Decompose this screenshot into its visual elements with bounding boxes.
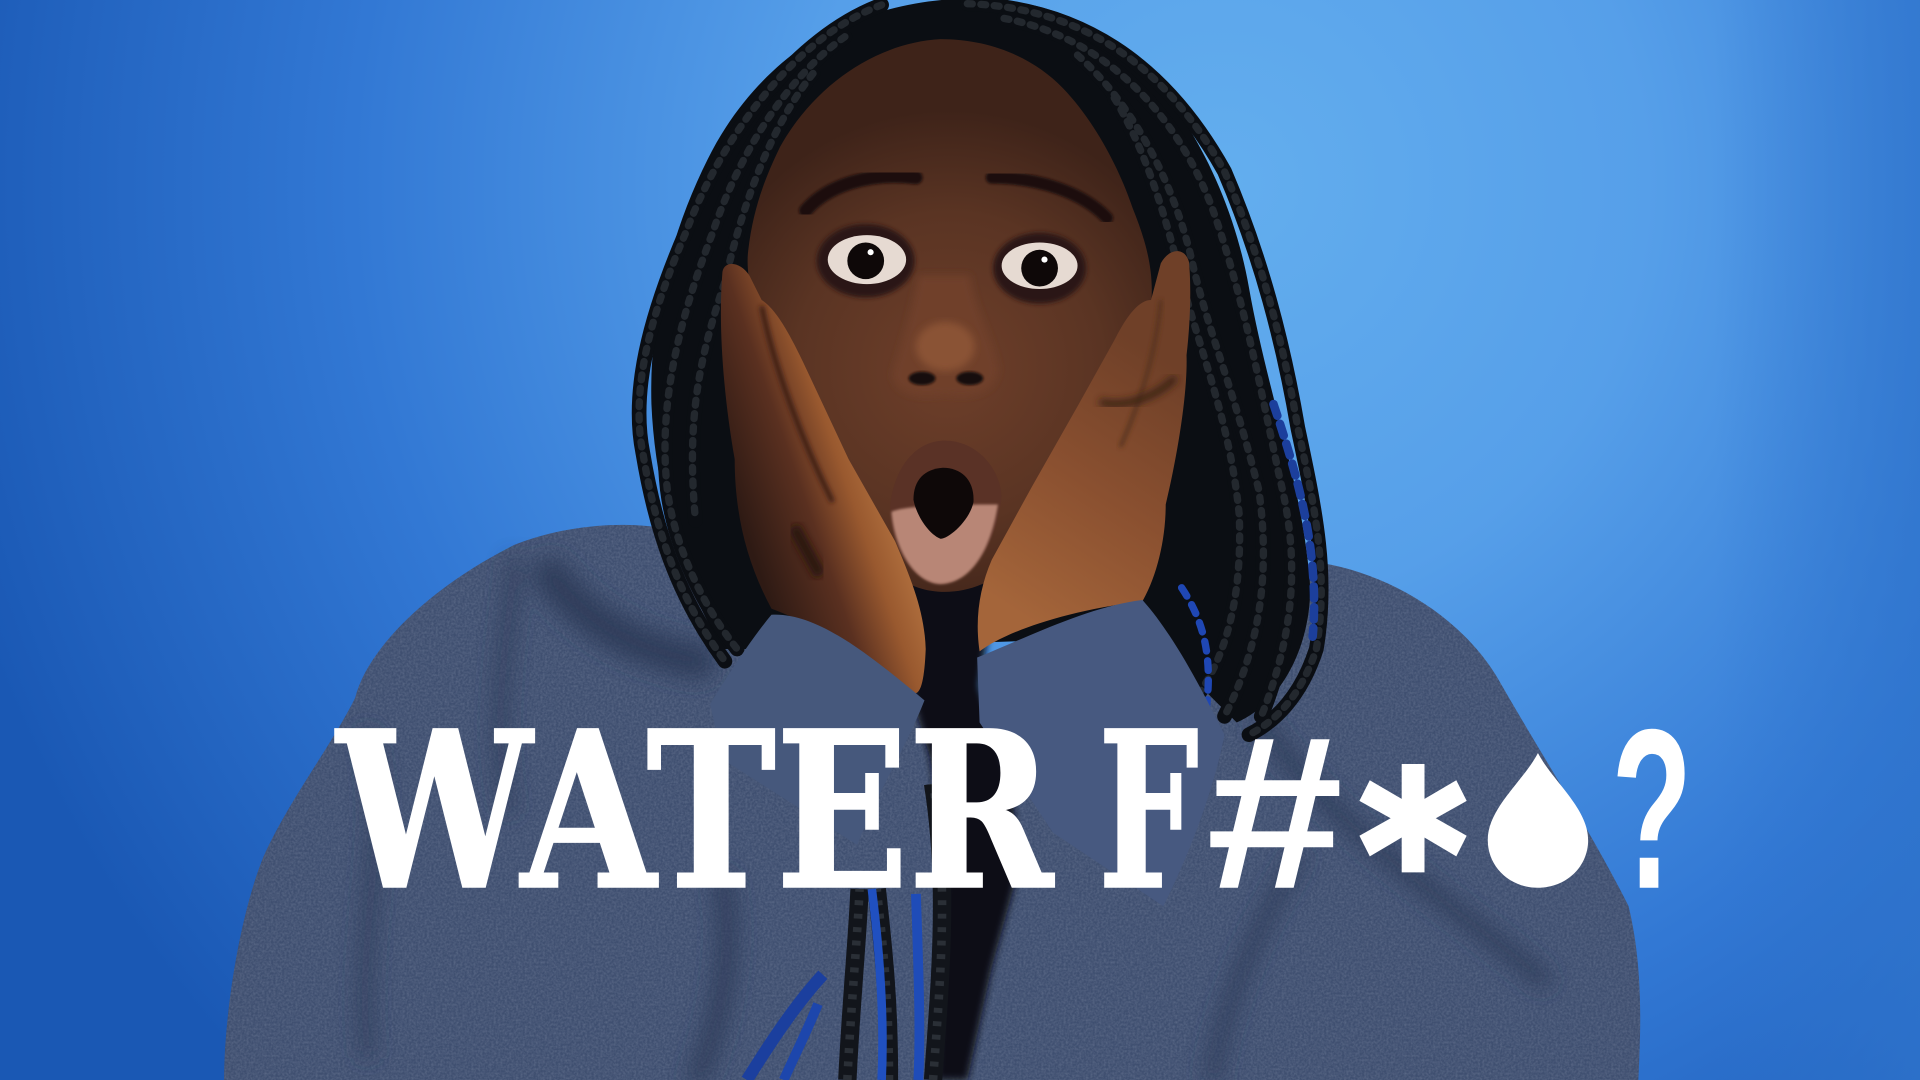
sweater: body and sleeves: [224, 525, 1640, 1080]
title: WATER F#*? with droplet: [335, 683, 1692, 983]
eyebrows: [806, 176, 916, 211]
hair: mass behind the head: [651, 0, 1310, 722]
sleeve shadow folds: [365, 563, 1543, 1078]
icon: water drop: [1488, 753, 1588, 888]
hanging braids in front of the sweater: [747, 784, 942, 1080]
left hand on cheek: [721, 264, 926, 693]
left eye: [817, 224, 915, 298]
title: WATER F#*? with droplet: #: [1206, 692, 1343, 935]
title: WATER F#*? with droplet: F: [1098, 685, 1199, 938]
title: WATER F#*? with droplet: ?: [1611, 683, 1692, 937]
shadow under the chin and central sweater fold: [900, 576, 1019, 1080]
right eye: [993, 233, 1086, 304]
hair: individual braids: [639, 4, 1321, 735]
sweater cuffs covering the wrists: [710, 600, 1224, 906]
right hand on cheek: [978, 251, 1190, 651]
title: WATER F#*? with droplet: WATER: [335, 685, 1055, 938]
title: WATER F#*? with droplet: *: [1359, 726, 1467, 983]
nose: [893, 276, 998, 396]
face: forehead, cheeks and chin: [748, 39, 1152, 592]
mouth: open in surprise: [890, 441, 1002, 584]
